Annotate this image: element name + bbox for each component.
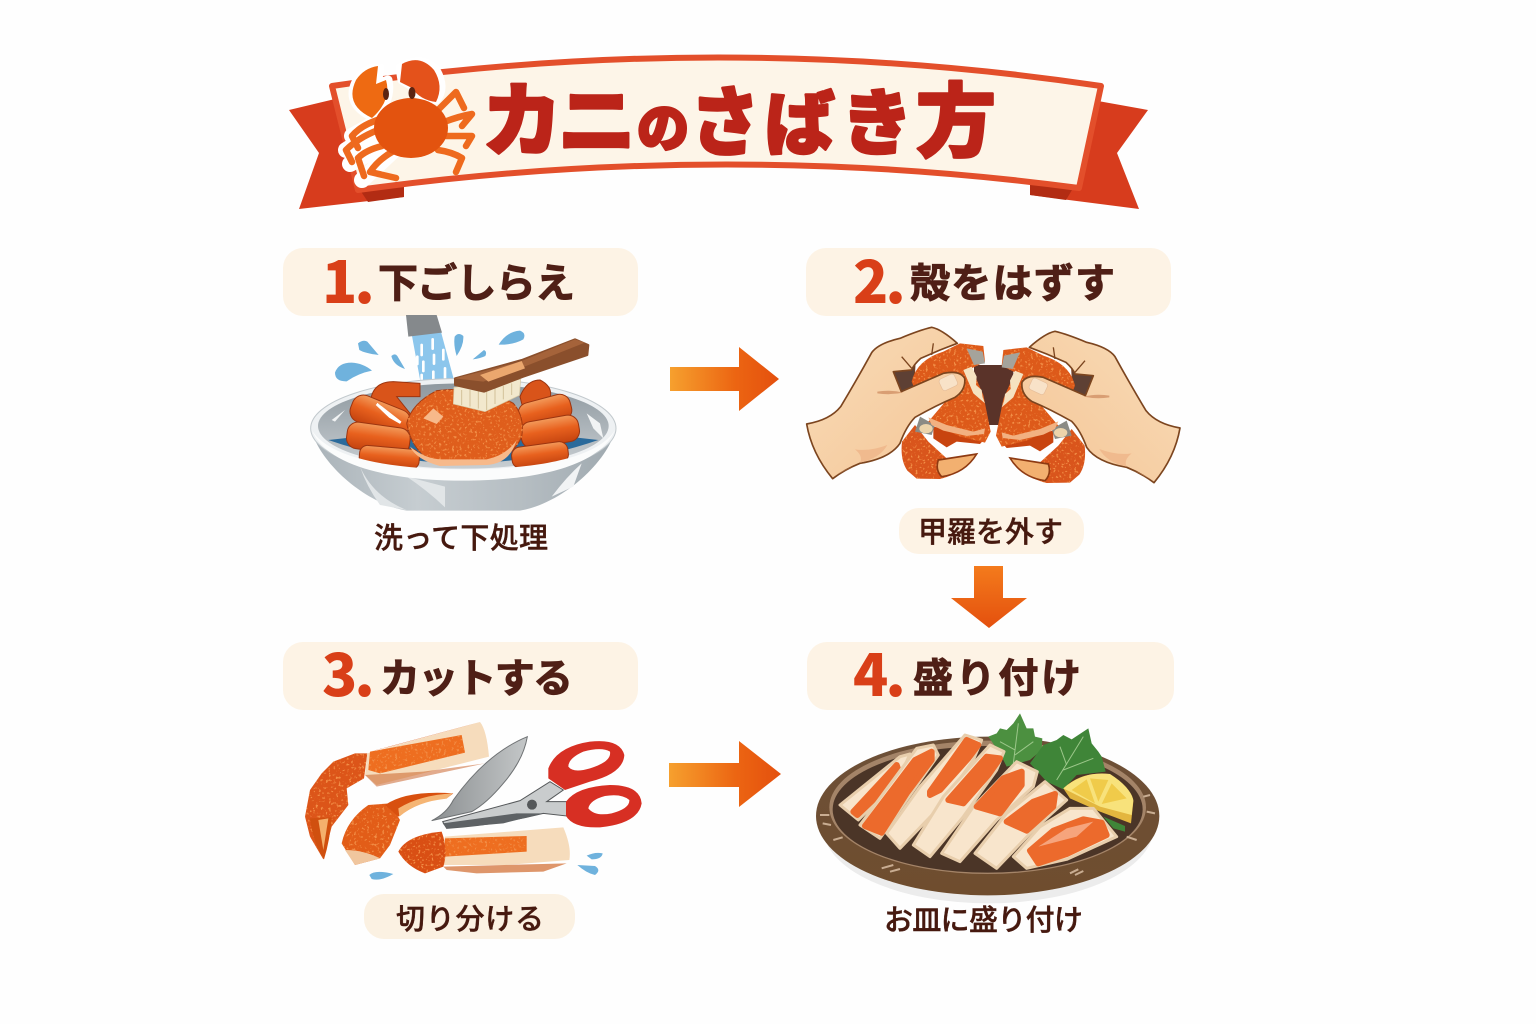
water spray [412,331,455,397]
claw piece [342,793,453,865]
step 2 heading [806,236,1171,320]
crab shell highlight [410,408,517,466]
step 4 heading: 盛り付け [913,646,1081,704]
title banner [289,57,1148,209]
arrow: step 3 to step 4 [669,741,781,807]
title text: き [841,65,913,170]
crab leg with claw tip [305,722,489,859]
title text: ば [765,69,835,170]
step 4 heading [807,629,1174,713]
left hand with crab half [807,327,991,479]
step 4 caption: お皿に盛り付け [884,897,1083,939]
lemon wedge [1063,773,1133,823]
step 3 heading [283,629,638,713]
banner panel [332,58,1101,190]
water drops [335,331,524,381]
scissors [432,737,642,828]
step 4 illustration: plated crab [816,713,1159,903]
step 2 illustration: hands separating shell [807,327,1180,483]
step 3 heading: 3. [322,629,372,713]
bowl [311,378,616,511]
crab meat pieces [840,735,1117,868]
crab inner [974,365,1013,425]
step 3 caption: 切り分ける [396,896,544,938]
step 1 heading: 下ごしらえ [378,251,575,309]
step 1 heading [283,236,638,320]
ribbon tail left [289,99,404,209]
arrow: step 2 to step 4 [951,566,1027,628]
plate [816,737,1159,895]
crab mascot [346,60,472,180]
step 1 illustration: washing crab in bowl [311,315,616,511]
title text: 方 [916,58,996,174]
arrow: step 1 to step 2 [670,347,779,411]
faucet [406,315,442,337]
step 2 caption: 甲羅を外す [918,509,1063,551]
title text: ニ [558,60,636,172]
step 2 heading: 殻をはずす [910,251,1115,309]
step 1 heading: 1. [322,236,372,320]
title text: さ [691,61,759,171]
water drops [369,853,603,880]
ribbon fold left [360,183,404,202]
bowl front rim [312,430,615,481]
title text: の [637,87,689,162]
step 3 heading: カットする [380,646,573,704]
crab body [407,389,522,463]
crab legs [345,380,581,470]
plate shadow [823,753,1153,903]
right hand with crab half [996,331,1180,483]
title text [482,57,996,174]
step 3 illustration: cutting legs [305,722,642,880]
step 3 caption [364,894,575,939]
ribbon fold right [1030,183,1072,200]
step 1 caption: 洗って下処理 [374,515,548,557]
ribbon tail right [1030,101,1148,209]
cut leg piece [398,827,570,873]
step 4 heading: 4. [853,629,903,713]
brush [453,339,588,412]
title text: カ [482,57,562,173]
step 2 heading: 2. [853,236,903,320]
shiso leaves [988,713,1125,832]
